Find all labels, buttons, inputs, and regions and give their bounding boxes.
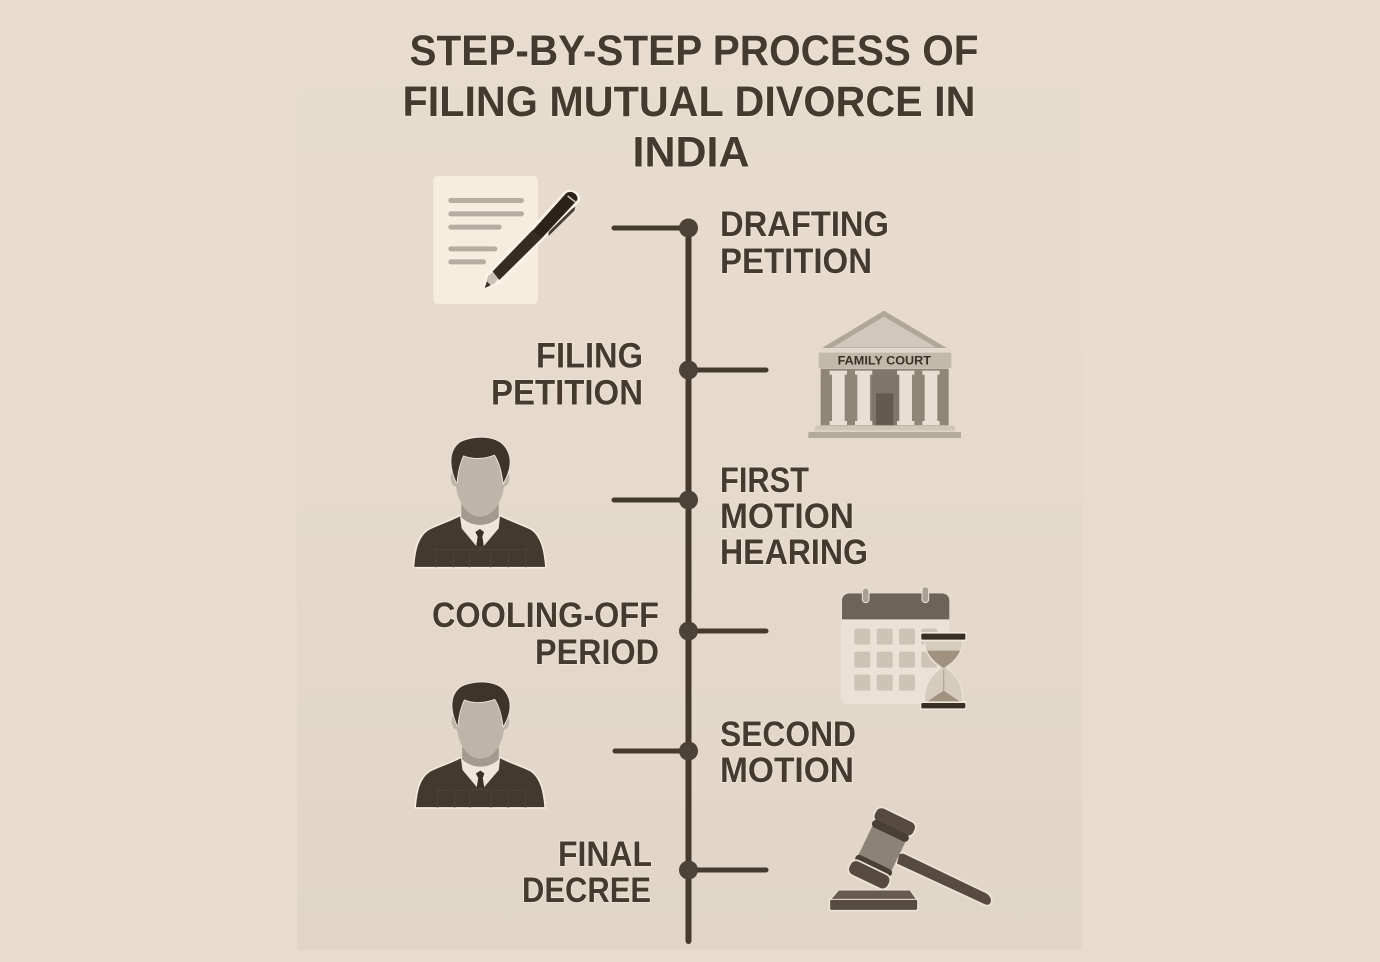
icon: family court building: FAMILY COURT — [838, 354, 932, 368]
label: cooling-off period — [432, 596, 659, 672]
step 5 connector and node — [615, 742, 698, 760]
label: filing petition: FILING — [536, 336, 643, 376]
icon: calendar and hourglass — [841, 587, 967, 710]
label: cooling-off period: COOLING-OFF — [432, 596, 659, 635]
label: filing petition: PETITION — [491, 374, 643, 412]
label: filing petition — [491, 336, 643, 412]
label: final decree: DECREE — [522, 871, 651, 910]
label: second motion — [720, 715, 856, 790]
step 6 connector and node — [679, 860, 766, 880]
icon: judge — [413, 438, 546, 568]
step 2 connector and node — [679, 360, 766, 380]
label: first motion hearing: HEARING — [720, 533, 868, 572]
label: drafting petition: PETITION — [720, 242, 872, 281]
icon: document and pen — [433, 176, 580, 304]
label: second motion: MOTION — [720, 751, 854, 790]
label: first motion hearing: MOTION — [720, 497, 854, 536]
step 4 connector and node — [679, 622, 766, 640]
label: final decree — [522, 835, 652, 910]
label: first motion hearing: FIRST — [720, 461, 809, 500]
title: FILING MUTUAL DIVORCE IN — [402, 78, 976, 126]
step 3 connector and node — [614, 490, 698, 510]
icon: family court building — [808, 311, 961, 438]
background panel — [297, 0, 1082, 950]
title: INDIA — [632, 128, 750, 176]
label: final decree: FINAL — [558, 835, 652, 874]
title — [402, 27, 978, 176]
step 1 connector and node — [614, 218, 698, 238]
title: STEP-BY-STEP PROCESS OF — [410, 27, 978, 75]
icon: judge — [415, 682, 545, 808]
icon: gavel — [829, 805, 992, 911]
label: drafting petition — [720, 205, 889, 281]
label: drafting petition: DRAFTING — [720, 205, 889, 244]
timeline spine — [686, 228, 692, 944]
label: cooling-off period: PERIOD — [535, 633, 659, 672]
label: first motion hearing — [720, 461, 868, 572]
label: second motion: SECOND — [720, 715, 856, 754]
